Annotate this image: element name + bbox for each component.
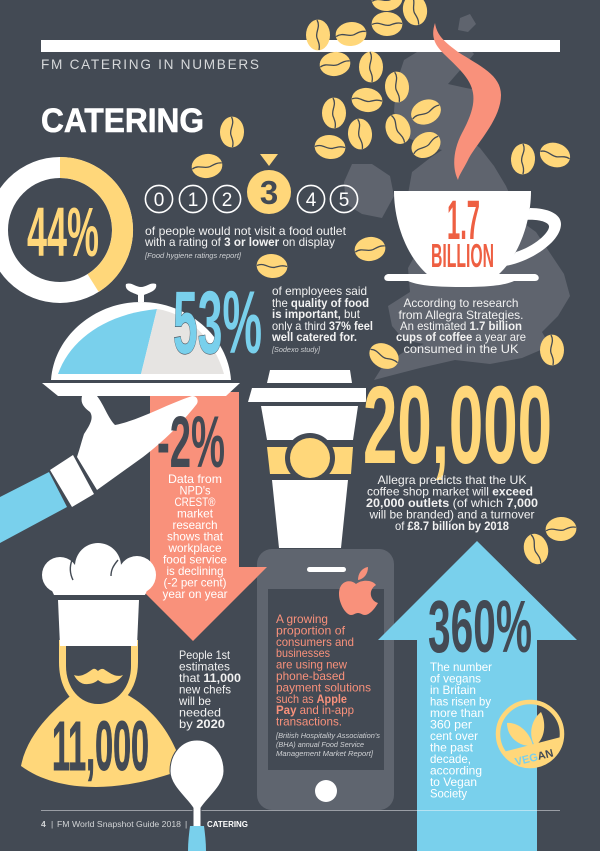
360% text block: 360 per [430, 718, 472, 732]
chefs text block: new chefs [179, 684, 231, 696]
phone text: proportion of [276, 624, 346, 637]
44% text block: of people would not visit a food outlet [145, 225, 347, 238]
360% text block: more than [430, 707, 484, 720]
takeaway coffee cup [248, 370, 366, 548]
footer line over arrow [417, 810, 537, 811]
text: 53% [173, 272, 262, 372]
53% text block: [Sodexo study] [271, 345, 321, 354]
53% text block: the quality of food [272, 297, 369, 310]
360% text block [430, 661, 492, 800]
360% text block: according [430, 764, 482, 778]
coffee text block: According to research [404, 297, 518, 310]
phone text: A growing [276, 613, 328, 626]
footer line [41, 810, 560, 811]
53% text block: is important, but [272, 308, 361, 321]
coffee cup with saucer: BILLION [431, 237, 494, 274]
hygiene rating scale: 4 [306, 190, 317, 211]
phone text [276, 613, 371, 729]
20,000 text block: Allegra predicts that the UK [378, 474, 527, 487]
footer text: 4 [41, 819, 46, 829]
-2% text block: market [177, 508, 214, 520]
chefs text block: needed [179, 706, 221, 720]
360% text block: of vegans [430, 672, 481, 686]
360% text block: has risen by [430, 696, 491, 708]
360% text block: cent over [430, 730, 478, 743]
title: CATERING [41, 102, 204, 140]
coffee text block: consumed in the UK [404, 343, 519, 356]
cloche [42, 284, 240, 396]
salmon down arrow [119, 392, 267, 641]
chefs text block: by 2020 [179, 718, 225, 731]
360% text block: the past [430, 742, 474, 754]
chefs text block [178, 649, 241, 731]
phone source note: Management Market Report] [276, 749, 374, 758]
footer text: CATERING [207, 819, 248, 829]
-2% text block: Data from [168, 473, 222, 486]
-2% text block: (-2 per cent) [164, 576, 227, 590]
chefs text block: People 1st [179, 649, 231, 662]
coffee text block [396, 297, 526, 356]
coffee cup with saucer [384, 188, 561, 287]
hygiene rating scale: 5 [339, 190, 349, 211]
phone text: are using new [276, 659, 348, 672]
coffee cup with saucer: 1.7 [447, 188, 480, 251]
53% text block: only a third 37% feel [272, 320, 373, 333]
-2% text block [162, 473, 228, 601]
360% text block: decade, [430, 753, 471, 766]
phone source note: (BHA) annual Food Service [276, 740, 364, 749]
20,000 text block: of £8.7 billion by 2018 [395, 520, 510, 533]
phone text: such as Apple [276, 693, 348, 706]
hygiene rating scale: 1 [188, 190, 198, 211]
-2% text block: research [172, 519, 218, 532]
chef [21, 543, 176, 787]
coffee text block: An estimated 1.7 billion [400, 320, 522, 333]
chefs text block: estimates [179, 660, 230, 674]
coffee text block: cups of coffee a year are [396, 331, 526, 344]
vegan badge: VEGAN [514, 747, 555, 769]
-2% text block: NPD's [180, 484, 211, 498]
salmon arrow tip over phone [239, 567, 267, 584]
top white bar [41, 40, 560, 52]
phone text: transactions. [276, 716, 342, 729]
-2% figure: -2% [157, 402, 225, 483]
phone text: businesses [276, 647, 330, 660]
chefs text block: will be [178, 695, 211, 708]
-2% text block: is declining [166, 565, 224, 578]
360% text block: Society [430, 788, 467, 800]
20,000 text block: coffee shop market will exceed [367, 486, 533, 498]
-2% text block: shows that [167, 530, 224, 544]
20,000 text block: will be branded) and a turnover [368, 508, 535, 522]
hygiene rating scale: 2 [222, 190, 232, 211]
phone text: Pay and in-app [276, 704, 354, 717]
spoon [170, 740, 224, 851]
footer text: | [185, 819, 187, 829]
blue up arrow [378, 541, 577, 851]
phone text: payment solutions [276, 681, 371, 694]
44% figure: 44% [27, 193, 99, 271]
steam [433, 23, 501, 180]
section label: FM CATERING IN NUMBERS [41, 57, 259, 72]
phone text: phone-based [276, 670, 345, 683]
map of the UK [344, 14, 570, 380]
hygiene rating scale: 0 [154, 190, 164, 211]
icon: apple logo [339, 567, 378, 615]
footer text [41, 819, 248, 829]
hygiene rating scale: 3 [260, 174, 278, 211]
-2% text block: year on year [162, 588, 228, 601]
chefs text block: that 11,000 [179, 672, 241, 685]
-2% text block: food service [163, 554, 227, 566]
20,000 text block [366, 474, 538, 533]
footer text: | [51, 819, 53, 829]
footer text: FM World Snapshot Guide 2018 [57, 819, 181, 829]
20,000 text block: 20,000 outlets (of which 7,000 [366, 497, 538, 510]
-2% text block: workplace [167, 542, 222, 555]
53% text block [271, 285, 373, 354]
44% text block: [Food hygiene ratings report] [144, 251, 242, 260]
hygiene rating scale [145, 154, 358, 214]
phone text: consumers and [276, 636, 354, 649]
phone source note [275, 731, 380, 758]
53% text block: of employees said [272, 285, 367, 298]
coffee text block: from Allegra Strategies. [398, 309, 524, 322]
smartphone [257, 549, 394, 810]
44% text block: with a rating of 3 or lower on display [144, 236, 335, 249]
-2% text block: CREST® [174, 496, 216, 509]
vegan badge [498, 702, 562, 769]
360% text block: to Vegan [430, 776, 477, 789]
360% text block: in Britain [430, 684, 476, 697]
53% text block: well catered for. [271, 331, 357, 344]
chef: 11,000 [52, 707, 149, 785]
coffee beans [190, 0, 577, 567]
44% text block [144, 225, 347, 260]
phone source note: [British Hospitality Association's [275, 731, 380, 740]
hand with sleeve [0, 396, 198, 543]
360% text block: The number [430, 661, 492, 674]
donut chart 44% [0, 168, 122, 292]
